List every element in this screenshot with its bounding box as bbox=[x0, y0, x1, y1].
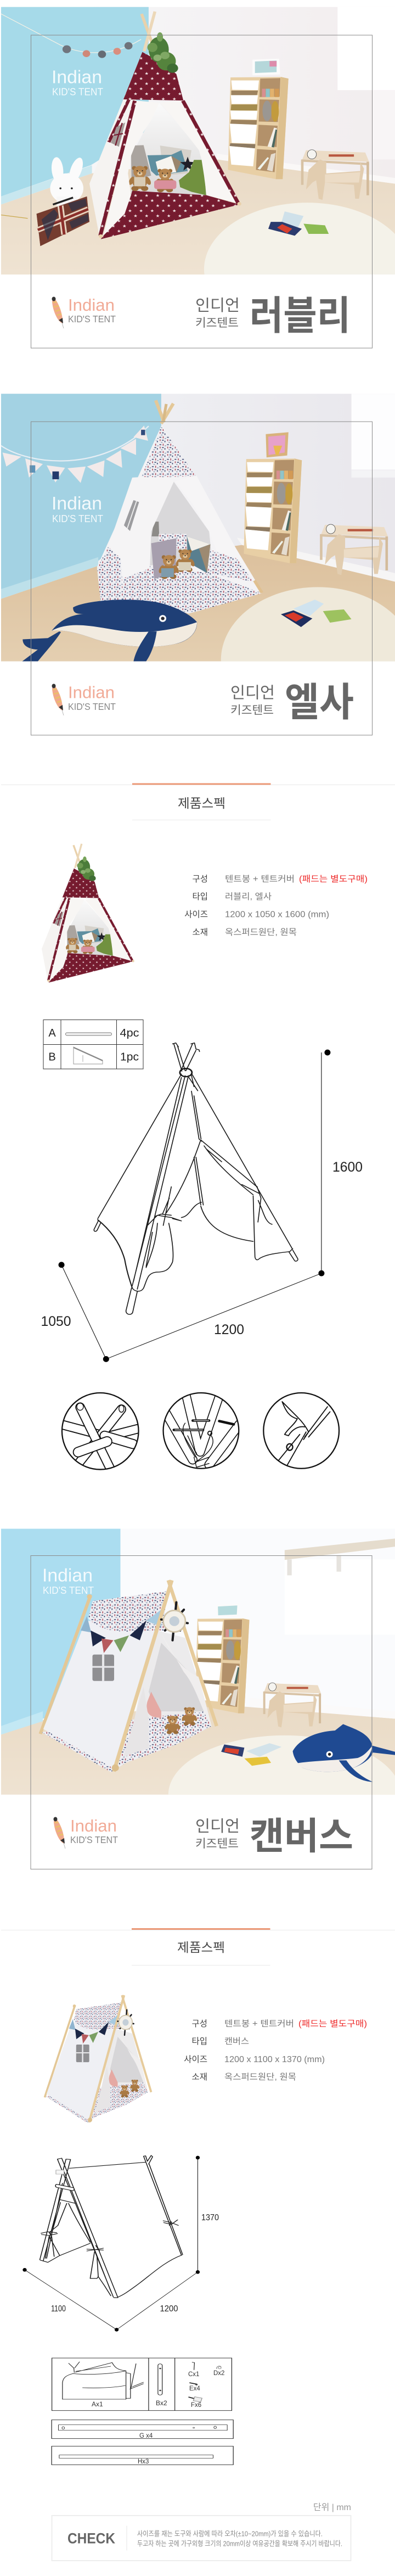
icon: feather bbox=[54, 1817, 65, 1849]
panel: Canvas tent hero bbox=[1, 1529, 395, 1869]
brand logo text: KID'S TENT bbox=[68, 313, 116, 324]
panel: Lovely tent hero bbox=[1, 7, 395, 348]
parts labels: Ax1 bbox=[92, 2400, 103, 2408]
callout: check note: CHECK bbox=[67, 2530, 115, 2546]
parts labels: Cx1 bbox=[188, 2371, 199, 2378]
spec table: 1200 x 1050 x 1600 (mm) bbox=[225, 910, 329, 919]
product title: 인디언 키즈텐트 캔버스: 키즈텐트 bbox=[195, 1838, 239, 1850]
unit note: 단위 | mm bbox=[313, 2502, 351, 2512]
detail circle: tent peg bbox=[263, 1393, 339, 1469]
dimension labels bbox=[41, 1160, 363, 1337]
product title: 인디언 키즈텐트 캔버스 bbox=[195, 1816, 353, 1857]
spec table: 옥스퍼드원단, 원목 bbox=[224, 2072, 296, 2082]
dimension labels: 1100 bbox=[51, 2304, 66, 2314]
spec table: 타입 bbox=[192, 892, 208, 901]
brand logo text bbox=[68, 295, 116, 324]
line drawing: tepee with dimensions bbox=[41, 1043, 363, 1362]
brand logo text: KID'S TENT bbox=[70, 1834, 118, 1845]
panel: product spec 2 bbox=[1, 1928, 395, 2561]
spec table: 소재 bbox=[192, 927, 208, 937]
brand wordmark on photo bbox=[52, 67, 103, 98]
product image: lovely tent bbox=[42, 844, 134, 983]
photo: elsa tent room bbox=[1, 394, 395, 662]
parts labels: Fx6 bbox=[191, 2402, 201, 2409]
parts labels: Ex4 bbox=[189, 2385, 200, 2392]
callout: check note: 두고자 하는 곳에 가구외형 크기의 20mm이상 여유공간을 확보해 주시기 바랍니다. bbox=[137, 2540, 342, 2547]
product title: 인디언 키즈텐트 엘사 bbox=[230, 681, 354, 725]
spec table: 소재 bbox=[191, 2072, 207, 2082]
product title: 인디언 키즈텐트 캔버스: 인디언 bbox=[195, 1818, 240, 1835]
brand wordmark on photo: Indian bbox=[52, 493, 102, 513]
parts table: B bbox=[48, 1051, 56, 1063]
spec table: 러블리, 엘사 bbox=[225, 892, 272, 901]
dimension labels: 1200 bbox=[214, 1322, 244, 1337]
line drawing: A-frame tent with dimensions bbox=[22, 2155, 219, 2332]
product title: 인디언 키즈텐트 엘사: 엘사 bbox=[285, 681, 354, 725]
photo: lovely tent room bbox=[1, 7, 395, 275]
brand logo text: KID'S TENT bbox=[68, 701, 116, 712]
brand logo text: Indian bbox=[68, 683, 115, 702]
heading: 제품스펙: 제품스펙 bbox=[177, 1940, 225, 1955]
frame outline bbox=[31, 422, 372, 735]
spec table: 구성 bbox=[192, 874, 208, 884]
heading: 제품스펙: 제품스펙 bbox=[178, 796, 225, 810]
spec table: 1200 x 1100 x 1370 (mm) bbox=[224, 2055, 325, 2064]
spec table: 옥스퍼드원단, 원목 bbox=[225, 927, 297, 937]
detail circle: crossed poles bbox=[62, 1393, 139, 1470]
A-frame outline drawing bbox=[40, 2155, 183, 2298]
dimension labels: 1370 bbox=[201, 2213, 219, 2222]
spec table: (패드는 별도구매) bbox=[299, 874, 368, 884]
dimension lines bbox=[59, 1050, 330, 1362]
detail circles: joint close-ups bbox=[62, 1393, 339, 1470]
brand logo text: Indian bbox=[68, 295, 115, 315]
parts labels bbox=[92, 2370, 224, 2465]
product title: 인디언 키즈텐트 캔버스: 캔버스 bbox=[250, 1816, 353, 1857]
brand wordmark on photo bbox=[42, 1565, 94, 1596]
parts labels: Dx2 bbox=[213, 2370, 224, 2377]
parts labels: G x4 bbox=[139, 2433, 153, 2439]
dimension labels: 1200 bbox=[160, 2304, 178, 2314]
detail circle: lashed poles bbox=[163, 1393, 239, 1469]
spec table: 구성 bbox=[191, 2019, 207, 2029]
spec table: 사이즈 bbox=[184, 2054, 207, 2064]
icon: feather bbox=[52, 296, 64, 328]
brand logo text bbox=[68, 683, 116, 712]
spec table: 사이즈 bbox=[184, 909, 208, 919]
frame outline bbox=[31, 35, 372, 348]
parts table: 1pc bbox=[120, 1051, 139, 1063]
frame outline bbox=[31, 1556, 372, 1869]
spec table: 타입 bbox=[191, 2036, 207, 2046]
icon: feather bbox=[52, 684, 64, 715]
product title: 인디언 키즈텐트 엘사: 키즈텐트 bbox=[230, 704, 274, 717]
brand wordmark on photo: Indian bbox=[52, 67, 102, 87]
product title: 인디언 키즈텐트 러블리 bbox=[195, 294, 351, 338]
brand wordmark on photo: KID'S TENT bbox=[43, 1585, 94, 1596]
spec table: (패드는 별도구매) bbox=[298, 2019, 367, 2029]
parts labels: Bx2 bbox=[156, 2399, 167, 2407]
parts table bbox=[43, 1020, 143, 1069]
product title: 인디언 키즈텐트 러블리: 인디언 bbox=[195, 297, 240, 315]
section heading rule bbox=[1, 783, 395, 820]
dimension lines bbox=[22, 2156, 200, 2332]
brand wordmark on photo: KID'S TENT bbox=[52, 87, 103, 98]
product title: 인디언 키즈텐트 엘사: 인디언 bbox=[230, 684, 275, 702]
section heading rule bbox=[1, 1928, 395, 1965]
spec table: 캔버스 bbox=[224, 2036, 249, 2046]
brand wordmark on photo: KID'S TENT bbox=[52, 513, 103, 524]
dimension labels: 1600 bbox=[332, 1160, 363, 1175]
product title: 인디언 키즈텐트 러블리: 키즈텐트 bbox=[195, 317, 239, 329]
spec table bbox=[184, 874, 368, 937]
panel: Elsa tent hero bbox=[1, 394, 395, 735]
callout: check note: 사이즈를 재는 도구와 사람에 따라 오차(±10~20mm)가 있을 수 있습니다. bbox=[137, 2530, 323, 2538]
callout: check note bbox=[52, 2516, 351, 2561]
tepee outline drawing bbox=[94, 1043, 298, 1314]
spec table: 텐트봉 + 텐트커버 bbox=[224, 2019, 294, 2029]
parts table: 4pc bbox=[120, 1027, 139, 1039]
parts boxes and drawings bbox=[52, 2358, 233, 2465]
dimension labels bbox=[51, 2213, 219, 2314]
brand logo text: Indian bbox=[70, 1816, 117, 1835]
photo: canvas tent room bbox=[1, 1528, 395, 1795]
product title: 인디언 키즈텐트 러블리: 러블리 bbox=[250, 294, 351, 338]
brand wordmark on photo: Indian bbox=[42, 1565, 93, 1586]
panel: product spec 1 bbox=[1, 783, 395, 1470]
brand wordmark on photo bbox=[52, 493, 103, 524]
parts labels: Hx3 bbox=[138, 2459, 149, 2465]
product image: canvas tent bbox=[44, 1995, 151, 2123]
spec table: 텐트봉 + 텐트커버 bbox=[225, 874, 295, 884]
spec table bbox=[184, 2019, 367, 2082]
dimension labels: 1050 bbox=[41, 1314, 71, 1329]
brand logo text bbox=[70, 1816, 118, 1845]
parts diagram bbox=[52, 2358, 233, 2465]
parts table: A bbox=[48, 1027, 56, 1039]
